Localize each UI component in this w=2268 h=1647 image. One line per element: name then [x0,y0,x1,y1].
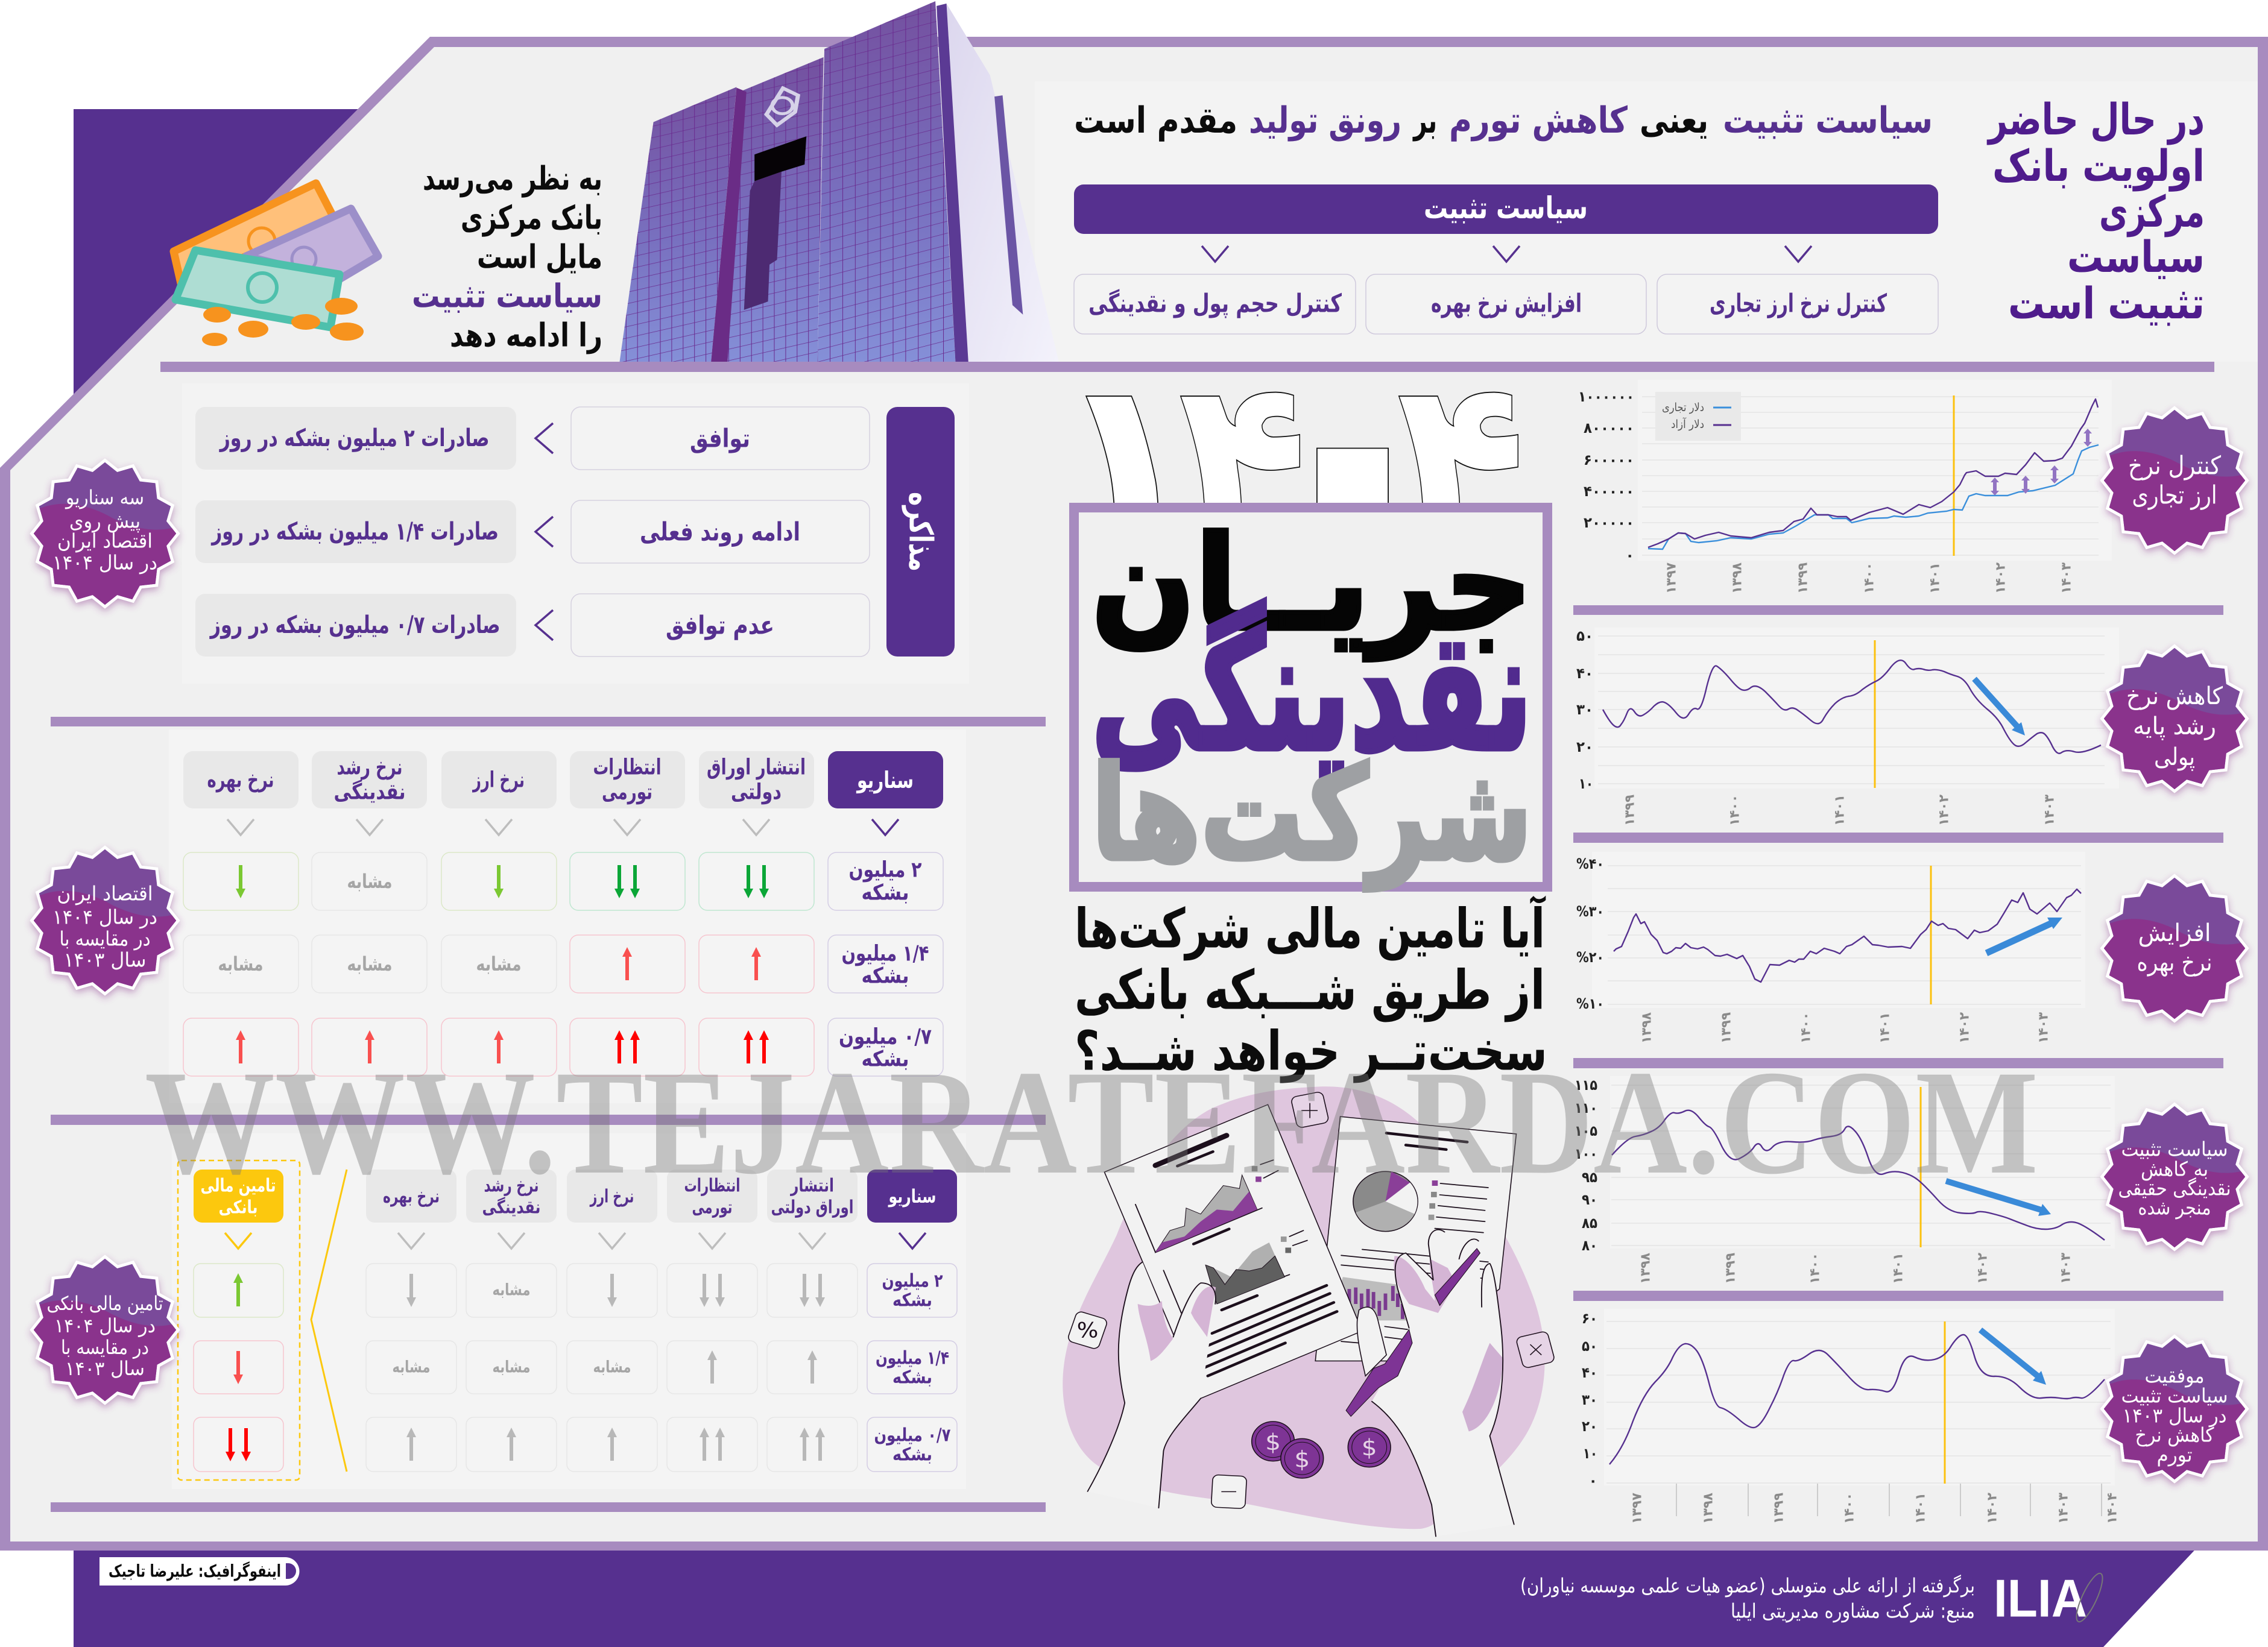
table 2 headers: نرخ بهره [383,1186,440,1207]
chart 4 axis: ۱۱۵ [1575,1077,1597,1094]
table 2 row: 1.4 million: مشابه [593,1358,631,1377]
badge: bank financing: در سال ۱۴۰۴ [54,1314,156,1337]
small math tiles [1067,1091,1555,1509]
chart 5 year labels: ۱۳۹۷ [1629,1492,1645,1524]
chart 4 line [1612,1110,2105,1240]
badge: control exchange rate: ارز تجاری [2132,480,2217,510]
badge: real liquidity decline: به کاهش [2141,1157,2208,1180]
chart 5 year labels: ۱۳۹۹ [1772,1493,1786,1524]
table 2 row: 1.4 million: ۱/۴ میلیون [876,1348,949,1368]
text block: central bank tendency: سیاست تثبیت [412,277,602,315]
table 2 headers: انتشار [789,1176,834,1196]
bank financing column [178,1160,300,1480]
chart 5 line [1609,1335,2105,1464]
pen [1346,1249,1480,1417]
chart 4 trend arrow [1946,1181,2051,1216]
table 2 chevrons [398,1233,926,1249]
chart 4 axis: ۱۰۰ [1575,1145,1597,1162]
chart 2 year labels [1622,794,2058,826]
chart 5 year labels: ۱۴۰۲ [1985,1492,2000,1524]
chart 4 axis: ۹۵ [1582,1169,1597,1186]
bank financing column: بانکی [218,1197,258,1218]
scenario: agreement [195,407,870,470]
chart 2 year labels: ۱۴۰۱ [1832,795,1848,826]
gap arrows [1991,429,2092,496]
badge: Iran economy: سال ۱۴۰۳ [64,948,147,972]
badge: bank financing [27,1252,183,1408]
badge: real liquidity decline: سیاست تثبیت [2121,1137,2228,1161]
heading: current priority: مرکزی [2099,186,2205,238]
row: 2 million barrels: بشکه [861,880,909,905]
chart 5 year labels: ۱۳۹۸ [1701,1492,1716,1524]
row: 2 million barrels: مشابه [347,870,392,893]
badge: Iran economy: در سال ۱۴۰۴ [52,905,157,928]
policy tools boxes [1074,274,1938,334]
watermark: WWW.TEJARATEFARDA.COM [145,1039,2038,1205]
chart 4 year labels [1638,1252,2073,1284]
chart 5 year labels: ۱۴۰۴ [2105,1493,2120,1524]
chart 1: exchange rate [1578,380,2112,594]
chart 3 year labels: ۱۴۰۱ [1878,1012,1892,1044]
table chevrons [227,819,899,835]
table 2 headers: نقدینگی [482,1196,540,1218]
outlined year 1404: ۴ [1397,321,1526,622]
table 2 row: 2 million: ۲ میلیون [882,1271,943,1291]
dollar coins: $ [1362,1435,1377,1461]
panel: policy heading: رونق تولید [1249,99,1401,142]
row: 1.4 million barrels: مشابه [347,953,392,975]
chart 3 axis: %۲۰ [1576,949,1604,966]
text block: central bank tendency: را ادامه دهد [450,316,602,354]
source text [1520,1573,1975,1623]
badge: base money growth [2097,641,2252,796]
chart 2 axis: ۲۰ [1576,738,1593,755]
badge: three scenarios: پیش روی [69,509,141,533]
ILIA logo: ILIA [1994,1569,2087,1628]
badge: inflation reduction: موفقیت [2144,1364,2205,1388]
badge: real liquidity decline [2097,1099,2252,1255]
chart 3 year labels: ۱۴۰۲ [1957,1012,1972,1044]
chart 5 axis: ۰ [1588,1472,1597,1489]
chart 2 year labels: ۱۴۰۳ [2042,794,2058,826]
badge: three scenarios: اقتصاد ایران [57,529,153,552]
table 2 row: 1.4 million [366,1341,957,1394]
chart 4 year labels: ۱۴۰۳ [2059,1252,2073,1284]
title: liquidity: نقدینگی [1091,597,1532,787]
row: 1.4 million barrels [183,935,943,993]
text block: central bank tendency: مایل است [477,238,602,276]
panel: policy heading [1074,99,1933,142]
table: Iran economy scenarios [169,729,966,1103]
table 2 row: 1.4 million: مشابه [392,1358,431,1377]
question text: از طریق شـــبکه بانکی [1075,959,1545,1022]
chart 1 axis: ۶۰۰۰۰۰ [1584,452,1634,468]
table 2 headers: اوراق دولتی [771,1197,854,1218]
question text: آیا تامین مالی شرکت‌ها [1075,896,1546,961]
outlined year 1404: ۱ [1051,321,1204,622]
table 2 row: 0.7 million: بشکه [892,1444,932,1465]
badge: base money growth: رشد پایه [2133,713,2216,740]
badge: base money growth: پولی [2154,743,2195,771]
question text [1075,896,1547,1083]
chart 2: monetary base growth [1576,628,2119,826]
text block: central bank tendency [412,159,602,354]
badge: inflation reduction: سیاست تثبیت [2121,1384,2228,1407]
badge: inflation reduction: در سال ۱۴۰۳ [2123,1403,2226,1428]
chart 3 line [1614,889,2081,982]
chart 2 year labels: ۱۴۰۲ [1937,794,1951,826]
heading: current priority: تثبیت است [2008,278,2205,329]
chart 3 year labels: ۱۳۹۸ [1639,1012,1655,1044]
badge: interest rate increase: نرخ بهره [2137,949,2212,977]
title: companies: شرکت‌ها [1091,738,1532,891]
chart 2 axis: ۱۰ [1579,775,1593,792]
commercial dollar line [1648,445,2099,549]
chart 5 axis: ۴۰ [1582,1364,1597,1381]
table headers: انتظارات [593,755,661,780]
chart 4 year labels: ۱۳۹۹ [1723,1253,1738,1284]
question text: سخت‌تــر خواهد شــد؟ [1075,1020,1547,1083]
credit pill: اینفوگرافیک: علیرضا تاجیک [109,1561,281,1581]
negotiation label [886,407,955,657]
table headers: انتشار اوراق [707,755,806,780]
panel: policy heading: کاهش تورم [1449,99,1628,142]
table headers: نقدینگی [334,779,405,804]
chart 3 year labels: ۱۴۰۰ [1798,1012,1814,1044]
row: 1.4 million barrels: بشکه [861,963,909,989]
chart 4 axis: ۱۰۵ [1575,1123,1597,1139]
scenario: current trend: ادامه روند فعلی [640,517,800,547]
chart 1 year labels: ۱۴۰۰ [1862,562,1877,594]
report paper right [1315,1116,1516,1361]
scenario: no agreement: عدم توافق [666,610,774,640]
chart 1 axis: ۸۰۰۰۰۰ [1584,420,1634,436]
panel: negotiation scenarios [182,383,969,684]
table 2 headers: انتظارات [684,1176,741,1196]
chart 4 year labels: ۱۴۰۱ [1891,1253,1906,1284]
footer band [74,1543,2201,1647]
outlined year 1404 [1051,218,1526,696]
dollar coins: $ [1294,1447,1310,1473]
heading: current priority [1987,94,2205,329]
chart 4 axis: ۸۵ [1582,1215,1597,1232]
scenario: agreement: توافق [690,423,750,453]
badge: interest rate increase [2097,871,2252,1026]
free dollar line [1648,399,2098,547]
table 2 row: 2 million [366,1264,957,1317]
chart 2 line [1603,660,2101,754]
policy tools boxes: کنترل نرخ ارز تجاری [1710,288,1887,318]
report paper left [1104,1104,1362,1399]
table 2 row: 1.4 million: مشابه [492,1358,531,1377]
row: 1.4 million barrels: مشابه [476,953,521,975]
table headers: نرخ بهره [207,768,274,792]
scenario: current trend [195,500,870,563]
row: 2 million barrels: ۲ میلیون [849,857,922,883]
badge: bank financing: سال ۱۴۰۳ [65,1357,145,1380]
title box [1074,508,1547,891]
chart 4 year labels: ۱۳۹۸ [1638,1252,1654,1284]
chart 1 year labels: ۱۴۰۲ [1994,562,2008,594]
badge: real liquidity decline: منجر شده [2138,1196,2211,1219]
badge: real liquidity decline: نقدینگی حقیقی [2118,1177,2231,1200]
chart 4 year labels: ۱۴۰۲ [1976,1252,1990,1284]
scenario: no agreement [195,594,870,657]
chart 2 axis [1576,628,2105,792]
badge: control exchange rate [2097,403,2252,558]
right hand [1357,1230,1514,1536]
chart 1 year labels [1664,562,2074,594]
badge: inflation reduction: تورم [2156,1443,2193,1466]
table 2 row: 2 million: مشابه [492,1280,531,1300]
chart 3 trend arrow [1986,918,2062,953]
chart 5 axis: ۲۰ [1582,1418,1597,1435]
chart 1 axis: ۲۰۰۰۰۰ [1584,514,1634,531]
chart 5 year labels [1629,1492,2120,1524]
credit pill [100,1557,299,1586]
chart 5 trend arrow [1980,1330,2046,1385]
chart 4 axis: ۸۰ [1582,1237,1597,1254]
chart 3 axis: %۴۰ [1576,855,1604,872]
badge: Iran economy: اقتصاد ایران [57,881,153,905]
table 2 row: 2 million: بشکه [892,1290,932,1311]
badge: three scenarios: سه سناریو [65,486,144,509]
row: 0.7 million barrels: بشکه [861,1047,909,1072]
outlined year 1404: ۴ [1178,321,1307,622]
table 2 headers: نرخ ارز [589,1186,634,1207]
left hand [1088,1262,1216,1508]
chart 5 axis: ۱۰ [1583,1445,1597,1462]
chart 4 year labels: ۱۴۰۰ [1808,1253,1822,1284]
badge: base money growth: کاهش نرخ [2126,682,2223,710]
badge: bank financing: تامین مالی بانکی [47,1292,163,1315]
chart 3 axis [1576,855,2081,1012]
row: 0.7 million barrels: ۰/۷ میلیون [839,1025,932,1049]
table headers: نرخ ارز [472,768,525,792]
table 2 row: 0.7 million [366,1417,957,1472]
panel: policy heading: یعنی [1640,99,1708,142]
outlined year 1404: ۰ [1227,218,1478,696]
row: 1.4 million barrels: ۱/۴ میلیون [842,942,929,966]
chart legend [1655,392,1741,441]
source text: منبع: شرکت مشاوره مدیریتی ایلیا [1731,1599,1975,1623]
chart 2 trend arrow [1974,679,2025,735]
chart legend: دلار تجاری [1662,401,1704,414]
chart 1 axis: ۰ [1625,547,1634,564]
bar: stabilization policy [1074,184,1938,234]
illustration: money and coins [174,183,378,346]
badge: Iran economy: در مقایسه با [59,927,151,950]
bar: stabilization policy: سیاست تثبیت [1424,191,1588,225]
chart 3 year labels [1639,1012,2052,1044]
bracket to bank financing column [311,1170,347,1472]
table headers: سناریو [856,767,914,793]
chart 4 axis [1575,1077,2111,1254]
table 2 headers: تورمی [692,1197,732,1218]
chart 3 year labels: ۱۴۰۳ [2036,1012,2052,1044]
table 2 headers: سناریو [888,1186,936,1208]
panel: policy heading: مقدم است [1074,99,1237,142]
chart 1 axis: ۴۰۰۰۰۰ [1584,483,1634,500]
chart 4: real liquidity [1575,1076,2115,1284]
chart 5 year labels: ۱۴۰۱ [1913,1493,1928,1524]
scenario: current trend: صادرات ۱/۴ میلیون بشکه در روز [211,518,499,546]
table headers [183,751,943,808]
title: flow: جریــان [1091,508,1532,661]
badge: three scenarios: در سال ۱۴۰۴ [52,551,157,574]
chart 4 axis: ۱۱۰ [1575,1100,1597,1116]
table 2 headers [366,1170,957,1223]
table 2 row: 0.7 million: ۰/۷ میلیون [874,1425,950,1446]
policy tools boxes: کنترل حجم پول و نقدینگی [1088,288,1342,318]
illustration blob [1063,1086,1545,1529]
badge: control exchange rate: کنترل نرخ [2128,451,2221,480]
heading: current priority: در حال حاضر [1987,94,2205,145]
chart 5 axis: ۳۰ [1582,1391,1597,1408]
chart 3 axis: %۱۰ [1576,995,1604,1012]
chart 2 axis: ۳۰ [1576,701,1593,718]
source text: برگرفته از ارائه علی متوسلی (عضو هیات علمی موسسه نیاوران) [1520,1573,1975,1598]
policy tools chevrons [1202,246,1812,262]
panel: policy heading: بر [1412,99,1437,142]
badge: inflation reduction: کاهش نرخ [2135,1423,2214,1447]
heading: current priority: اولویت بانک [1992,140,2205,192]
chart 1 axis: ۱۰۰۰۰۰۰ [1578,388,1634,405]
chart 2 axis: ۵۰ [1576,628,1593,644]
dark purple corner block [74,109,374,422]
chart 3 year labels: ۱۳۹۹ [1719,1012,1734,1044]
scenario: no agreement: صادرات ۰/۷ میلیون بشکه در روز [209,611,501,639]
table headers: دولتی [731,780,782,804]
chart 1 year labels: ۱۳۹۸ [1729,562,1745,594]
row: 2 million barrels [183,852,943,910]
chart 4 axis: ۹۰ [1582,1191,1597,1208]
table 2 headers: نرخ رشد [484,1176,539,1196]
dollar coins: $ [1265,1429,1281,1455]
text block: central bank tendency: به نظر می‌رسد [423,159,602,198]
chart 1 year labels: ۱۴۰۱ [1927,562,1943,594]
chart legend: دلار آزاد [1671,417,1704,431]
chart 1 year labels: ۱۳۹۷ [1664,562,1679,594]
badge: Iran economy [27,842,183,999]
chart 1 year labels: ۱۴۰۳ [2059,562,2074,594]
table: bank financing scenarios [172,1133,966,1489]
text block: central bank tendency: بانک مرکزی [461,199,602,236]
bank financing column: تامین مالی [200,1176,276,1196]
table headers: نرخ رشد [336,755,403,780]
panel: top policy background [1035,81,2258,362]
policy tools boxes: افزایش نرخ بهره [1431,288,1582,318]
badge: inflation reduction [2097,1331,2252,1487]
chart 5 axis: ۶۰ [1582,1310,1597,1327]
chart 3 axis: %۳۰ [1576,903,1604,920]
chart 5 year labels: ۱۴۰۳ [2056,1492,2071,1524]
chart 5 axis: ۵۰ [1582,1338,1597,1355]
chart 2 axis: ۴۰ [1576,665,1593,682]
table headers: تورمی [602,780,652,804]
illustration: hands and reports [1063,1086,1555,1536]
badge: bank financing: در مقایسه با [61,1336,149,1359]
scenario: agreement: صادرات ۲ میلیون بشکه در روز [219,424,490,452]
chart 1 year labels: ۱۳۹۹ [1796,562,1810,594]
row: 0.7 million barrels [183,1018,943,1076]
badge: three scenarios [27,455,183,612]
table 2 row: 1.4 million: بشکه [892,1367,932,1388]
small math tiles: % [1077,1318,1098,1343]
row: 1.4 million barrels: مشابه [218,953,263,975]
chart 2 year labels: ۱۳۹۹ [1622,795,1638,826]
chart 5 year labels: ۱۴۰۰ [1842,1493,1857,1524]
chart 1 axis [1578,388,2099,564]
badge: interest rate increase: افزایش [2138,919,2211,947]
chart 5: inflation [1582,1309,2120,1524]
chart 5 axis [1582,1310,2111,1516]
dollar coins [1252,1422,1391,1478]
chart 2 year labels: ۱۴۰۰ [1727,795,1743,826]
negotiation label: مذاکره [902,492,940,572]
heading: current priority: سیاست [2067,231,2205,282]
illustration: central bank building [619,1,1059,362]
chart 3: interest rate [1576,852,2085,1044]
panel: policy heading: سیاست تثبیت [1723,99,1933,142]
